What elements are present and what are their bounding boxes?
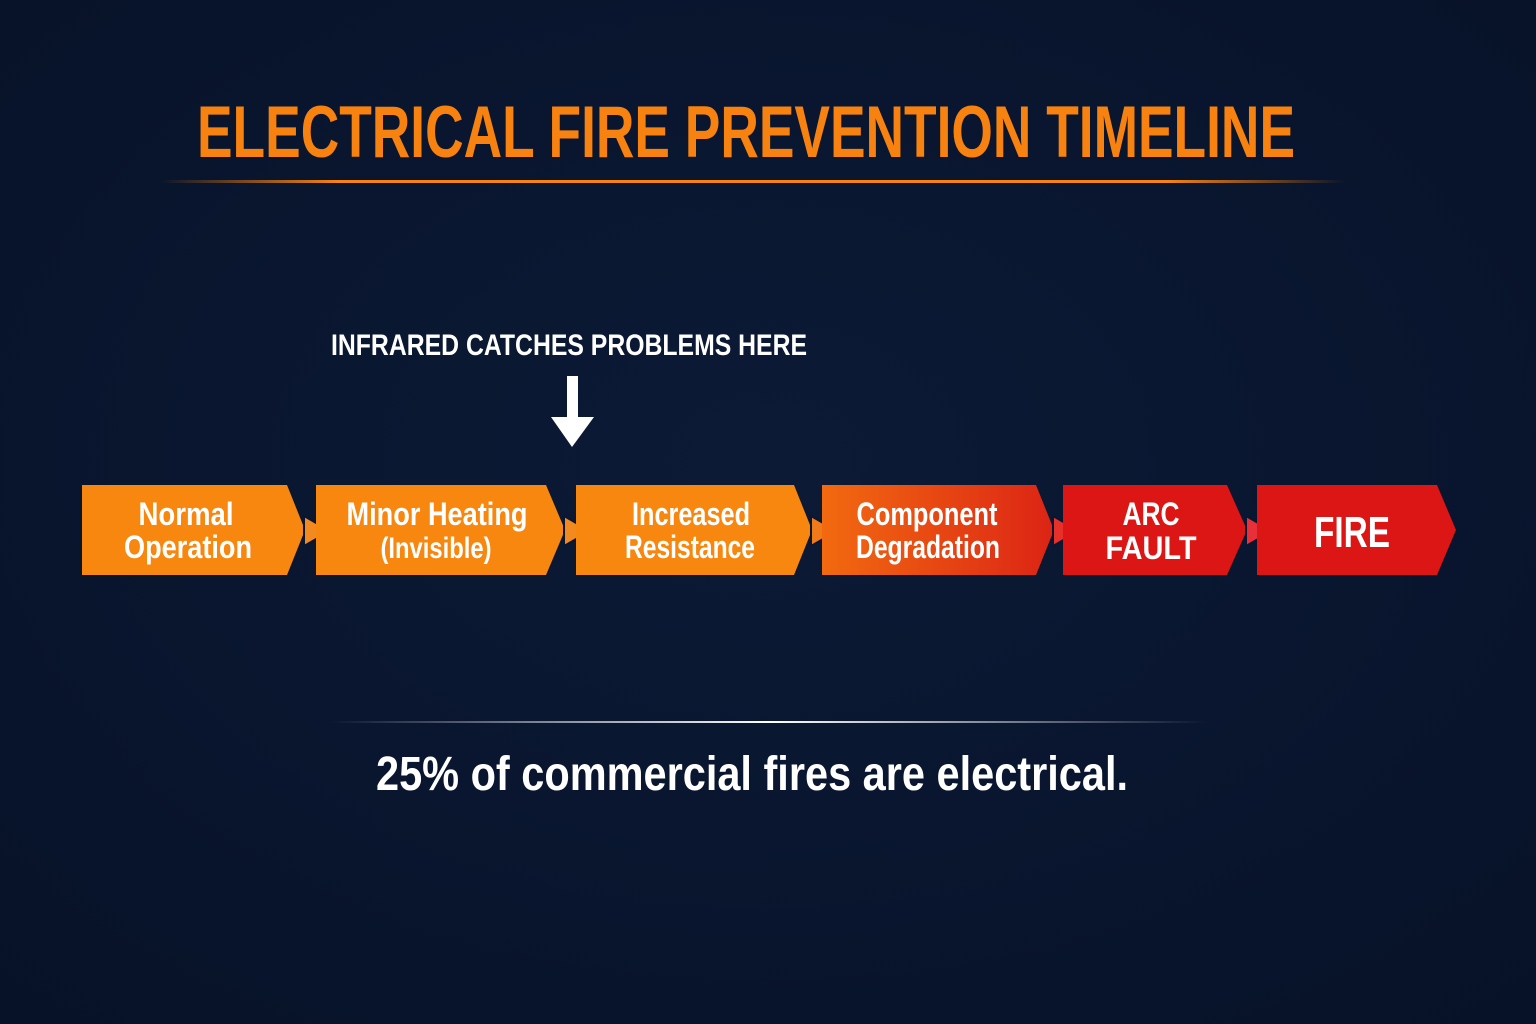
stage 5: FAULT (1106, 530, 1197, 566)
stage 2 (316, 485, 565, 575)
stage 1: Normal (138, 496, 234, 532)
timeline (82, 485, 1456, 575)
stage 4: Degradation (856, 529, 1000, 565)
stage 2: (Invisible) (380, 532, 492, 565)
stage 3: Resistance (625, 529, 755, 565)
stage 5: ARC (1122, 496, 1180, 532)
stage 5 (1063, 485, 1247, 575)
statistic: 25% of commercial fires are electrical. (376, 748, 1128, 801)
connector (1246, 516, 1272, 546)
stage 4: Component (856, 496, 998, 532)
connector (811, 516, 837, 546)
stage 3: Increased (632, 496, 750, 532)
stage 4 (822, 485, 1054, 575)
connector (564, 516, 590, 546)
stage 2: Minor Heating (346, 496, 528, 532)
connector (1053, 516, 1079, 546)
arrow: down (551, 376, 594, 447)
stage 6: FIRE (1314, 508, 1390, 557)
callout label: INFRARED CATCHES PROBLEMS HERE (331, 329, 807, 362)
stage 3 (576, 485, 812, 575)
connector (304, 516, 330, 546)
stage 6 (1257, 485, 1456, 575)
stage 1 (82, 485, 305, 575)
stage 1: Operation (124, 529, 252, 565)
